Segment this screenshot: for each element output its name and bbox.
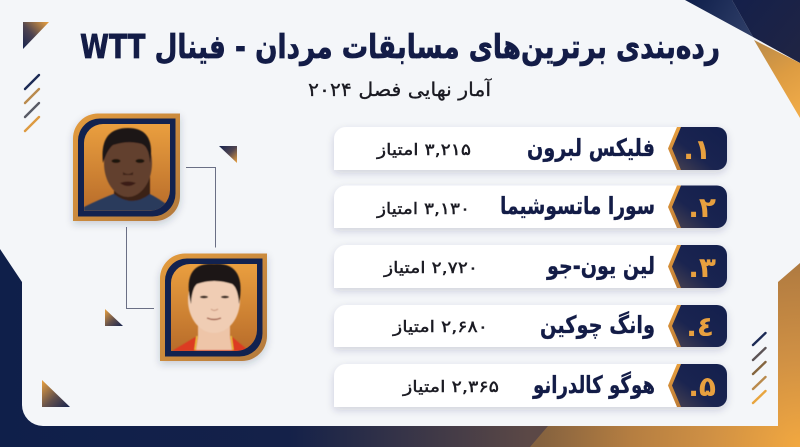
name: سورا ماتسوشیما xyxy=(500,192,655,220)
decorative triangle: top left xyxy=(23,22,49,49)
decorative stripes: left xyxy=(25,75,39,131)
rank badge 1: ۱. xyxy=(683,133,711,166)
decorative triangle: near connector top xyxy=(219,146,237,163)
name: لین یون-جو xyxy=(546,252,655,280)
row 5: Hugo Calderano xyxy=(334,364,727,407)
player portrait: Lin Yun-Ju xyxy=(160,254,267,361)
row 2: Sora Matsushima xyxy=(334,186,727,228)
name: وانگ چوکین xyxy=(540,311,655,339)
decorative stripes: right xyxy=(753,333,766,403)
player portrait: Felix Lebrun xyxy=(73,114,180,221)
row 3: Lin Yun-Ju xyxy=(334,245,727,288)
decorative triangle: near connector bottom xyxy=(105,309,123,326)
subtitle: آمار نهایی فصل ۲۰۲۴ xyxy=(308,77,492,101)
connector: player two to player one xyxy=(126,227,154,308)
rank badge 1 xyxy=(668,127,727,170)
rank badge 2 xyxy=(668,186,727,228)
rank badge 5 xyxy=(668,364,727,407)
rank badge 5: ۵. xyxy=(688,370,716,403)
rank badge 4: ٤. xyxy=(686,310,714,343)
points: ۲,۳۶۵ امتیاز xyxy=(402,377,499,397)
row 4: Wang Chuqin xyxy=(334,305,727,347)
rank badge 3 xyxy=(668,245,727,288)
row 1: Felix Lebrun xyxy=(334,127,727,170)
name: هوگو کالدرانو xyxy=(532,371,655,399)
points: ۳,۱۳۰ امتیاز xyxy=(376,199,470,219)
rank badge 2: ۲. xyxy=(688,191,716,224)
rank badge 4 xyxy=(668,305,727,347)
name: فلیکس لبرون xyxy=(527,134,655,162)
decorative triangle: bottom left xyxy=(42,380,70,407)
points: ۲,۷۲۰ امتیاز xyxy=(383,258,478,278)
points: ۲,۶۸۰ امتیاز xyxy=(392,317,488,337)
connector: player one to player two xyxy=(186,168,216,248)
rank badge 3: ۳. xyxy=(688,251,716,284)
points: ۳,۲۱۵ امتیاز xyxy=(376,140,471,160)
